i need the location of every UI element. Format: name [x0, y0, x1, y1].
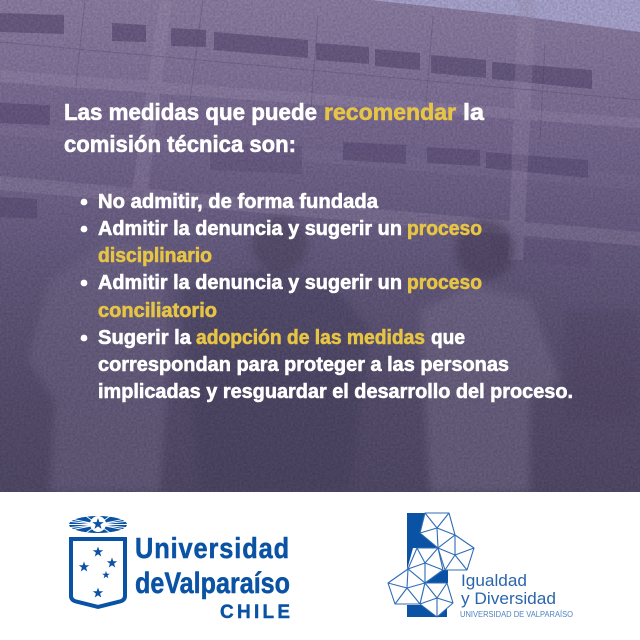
- logo: Igualdad y Diversidad: UNIVERSIDAD DE VALPARAÍSO: [460, 610, 573, 619]
- bullet list: Sugerir la: [98, 327, 192, 349]
- bullet list: implicadas y resguardar el desarrollo del proceso.: [98, 381, 573, 403]
- logo: Igualdad y Diversidad: [388, 513, 573, 619]
- bullet list: correspondan para proteger a las personas: [98, 354, 509, 376]
- bullet list: conciliatorio: [98, 300, 217, 322]
- panel: white logo band: [0, 492, 640, 640]
- bullet list: disciplinario: [98, 245, 212, 267]
- logo: Universidad de Valparaíso: deValparaíso: [135, 567, 290, 600]
- heading: [64, 99, 484, 157]
- bullet list: proceso: [407, 218, 482, 240]
- bullet list: que: [431, 327, 465, 349]
- heading: recomendar: [324, 99, 456, 125]
- heading: comisión técnica son:: [64, 131, 296, 157]
- bullet list: proceso: [407, 272, 482, 294]
- heading: Las medidas que puede: [64, 99, 317, 125]
- logo: Igualdad y Diversidad: Igualdad: [461, 571, 527, 590]
- logo: Universidad de Valparaíso: [66, 512, 290, 623]
- logo: Igualdad y Diversidad: y Diversidad: [461, 589, 556, 608]
- bullet list: Admitir la denuncia y sugerir un: [98, 272, 402, 294]
- bullet list: Admitir la denuncia y sugerir un: [98, 218, 402, 240]
- logo: Universidad de Valparaíso: CHILE: [220, 602, 290, 623]
- bullet list: No admitir, de forma fundada: [98, 191, 379, 213]
- logo: Universidad de Valparaíso: Universidad: [135, 533, 290, 565]
- bullet list: [81, 191, 573, 403]
- panel: photo background with purple overlay: [0, 0, 640, 492]
- bullet list: adopción de las medidas: [196, 327, 425, 349]
- heading: la: [463, 99, 484, 125]
